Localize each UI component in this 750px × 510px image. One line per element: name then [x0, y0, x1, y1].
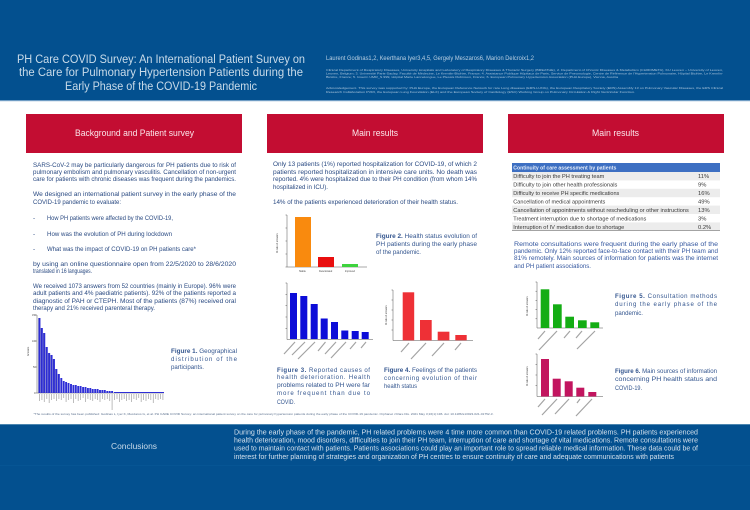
conclusions text — [234, 430, 698, 461]
text block: method and participants: translated in 16 languages. — [33, 268, 92, 275]
panel heading: main results middle: Main results — [352, 128, 398, 138]
conclusions heading: Conclusions — [111, 441, 157, 451]
panel heading: main results right: Main results — [592, 128, 639, 138]
table: continuity of care: Continuity of care assessment by patients — [513, 166, 616, 172]
table: continuity of care: 16% — [698, 191, 710, 197]
figure 1 caption: distribution of the — [171, 356, 238, 363]
table: continuity of care: Treatment interruption due to shortage of medications — [513, 216, 646, 222]
panel heading: background and patient survey: Background and Patient survey — [75, 128, 194, 138]
bullet list: survey aims: How was the evolution of PH during lockdown — [47, 231, 172, 238]
table: continuity of care: Interruption of IV medication due to shortage — [513, 225, 624, 231]
conclusions text: During the early phase of the pandemic, PH related problems were 4 time more common than COVID-19 related problems. PH patients experienced — [234, 430, 698, 436]
text block: method and participants — [33, 261, 237, 312]
text block: hospitalization: reported. 4% were hospitalized due to their PH condition (from whom 14% — [273, 176, 477, 183]
table: continuity of care: Difficulty to join the PH treating team — [513, 174, 604, 180]
text block: hospitalization — [273, 161, 478, 206]
text block: method and participants: We received 1073 answers from 52 countries (mainly in Europe). 96% were — [33, 283, 236, 290]
figure 3 caption: COVID. — [277, 399, 295, 406]
affiliations — [326, 68, 723, 79]
footnote: *The results of the survey has been published: Godinas L, Iyer K, Meszaros G, et al. PH CARE COVID Survey: an international patient survey on the care for pulmonary hypertension patients during the early phase of the COVID-19 pandemic. Orphanet J Rare Dis. 2021 May 3;16(1):196. doi: 10.1186/s13023-021-01752-3. — [34, 412, 494, 416]
footer band — [0, 424, 750, 510]
text block: remote consultations — [514, 241, 719, 270]
table: continuity of care: 13% — [698, 208, 710, 214]
conclusions text: health deterioration, mood disorders, difficulties to join their PH team, interruption of care and shortage of vital medications. Remote consultations were — [234, 438, 698, 444]
figure 3 caption — [277, 367, 371, 406]
figure 3 caption: health deterioration. Health — [277, 374, 370, 381]
figure 6 caption: COVID-19. — [615, 385, 642, 392]
text block: background: SARS-CoV-2 may be particularly dangerous for PH patients due to risk of — [33, 162, 236, 169]
header band — [0, 0, 750, 101]
text block: remote consultations: and PH patient associations. — [514, 263, 591, 270]
bullet list: survey aims: How PH patients were affected by the COVID-19, — [47, 215, 173, 222]
bar chart: figure 1 participants by country: Answers — [27, 346, 30, 356]
text block: background: pulmonary embolism and pulmonary vasculitis. Cancellation of non-urgent — [33, 169, 236, 176]
figure 5 caption — [615, 293, 718, 317]
bar chart: figure 2 health status: % ratio of answers — [276, 233, 279, 253]
table: continuity of care — [512, 163, 720, 231]
affiliations: Bicêtre, France; 5. Inserm UMR_S 999, Hôpital Marie Lannelongue, Le Plessis Robinson, France; 6. European Pulmonary Hypertension Association (PHA Europe), Vienna, Austria — [326, 75, 618, 79]
title: Early Phase of the COVID-19 Pandemic — [65, 79, 257, 93]
bar chart: figure 2 health status: Stable — [299, 270, 306, 273]
title — [17, 52, 305, 93]
figure 1 caption: Figure 1. Geographical — [171, 348, 237, 355]
figure 4 caption: health status — [384, 383, 417, 390]
text block: method and participants: diagnostic of PAH or CTEPH. Most of the patients (87%) received oral — [33, 298, 236, 305]
bar chart: figure 5 consultation methods — [526, 282, 603, 350]
figure 4 caption: concerning evolution of their — [384, 375, 477, 382]
text block: method and participants: therapy and 21% received parenteral therapy. — [33, 305, 155, 312]
figure 3 caption: problems related to PH were far — [277, 382, 370, 389]
table: continuity of care: 9% — [698, 182, 706, 188]
figure 6 caption — [615, 368, 717, 392]
figure 2 caption: PH patients during the early phase — [376, 241, 478, 248]
table: continuity of care: 3% — [698, 216, 706, 222]
rotated axis labels — [538, 399, 592, 416]
bar chart: figure 1 participants by country: 0 — [34, 392, 36, 395]
text block: remote consultations: Remote consultations were frequent during the early phase of the — [514, 241, 719, 248]
figure 5 caption: during the early phase of the — [615, 301, 718, 308]
text block: hospitalization: Only 13 patients (1%) reported hospitalization for COVID-19, of which 2 — [273, 161, 478, 168]
bar chart: figure 4 feelings: % ratio of answers — [385, 305, 388, 325]
bullet list: survey aims: - — [33, 215, 35, 222]
panel heading: main results middle — [267, 114, 483, 153]
text block: hospitalization: patients reported hospitalization in intensive care units. No death was — [273, 169, 477, 176]
authors: Laurent Godinas1,2, Keerthana Iyer3,4,5, Gergely Meszaros6, Marion Delcroix1,2 — [326, 55, 534, 62]
table: continuity of care: 11% — [698, 174, 709, 180]
bar chart: figure 2 health status: Improved — [345, 270, 356, 273]
text block: remote consultations: pandemic. Only 12% reported face-to-face contact with their PH team and — [514, 248, 718, 255]
figure 1 caption — [171, 348, 238, 371]
bar chart: figure 2 health status: Deteriorated — [319, 270, 333, 273]
rotated axis labels — [401, 343, 461, 359]
text block: background: We designed an international patient survey in the early phase of the — [33, 191, 237, 198]
bar chart: figure 6 information sources: % ratio of answers — [526, 366, 529, 386]
figure 3 caption: more frequent than due to — [277, 390, 371, 397]
text block: hospitalization: 14% of the patients experienced deterioration of their health status. — [273, 199, 458, 206]
figure 6 caption: Figure 6. Main sources of information — [615, 368, 717, 375]
table: continuity of care: Cancellation of appointments without rescheduling or other instructions — [513, 208, 689, 214]
acknowledgement: Acknowledgement. This survey was supported by: PHA Europe, the European Reference Network for rare Lung diseases (ERN-LUNG), the European Respiratory Society (ERS) Assembly 13 on Pulmonary Vascular Diseases, the ERS Clinical — [326, 86, 723, 90]
bar chart: figure 5 consultation methods: % ratio of answers — [526, 296, 529, 316]
figure 5 caption: pandemic. — [615, 310, 643, 317]
rotated axis labels — [538, 331, 595, 350]
text block: hospitalization: hospitalized in ICU). — [273, 184, 328, 191]
bar chart: figure 1 participants by country — [27, 314, 164, 410]
acknowledgement: Research Collaboration PVRI, the European Lung Foundation (ELF) and the European Society of Cardiology (ESC) Working Group on Pulmonary Circulation & Right Ventricular Function. — [326, 90, 635, 94]
text block: background — [33, 162, 237, 206]
bar chart: figure 6 information sources — [526, 354, 603, 416]
panel heading: background and patient survey — [26, 114, 242, 153]
figure 5 caption: Figure 5. Consultation methods — [615, 293, 717, 300]
text block: method and participants: by using an online questionnaire open from 22/5/2020 to 28/6/2020 — [33, 261, 237, 268]
affiliations: Clinical Department of Respiratory Diseases, University Hospitals and Laboratory of Respiratory Diseases & Thoracic Surgery (BREATHE), 2. Department of Chronic Diseases & Metabolism (CHROMETA), KU Leuven – University of Leuven, — [326, 68, 723, 72]
text block: background: COVID-19 pandemic to evaluate: — [33, 199, 121, 206]
affiliations: Leuven, Belgium; 3. Université Paris-Saclay, Faculté de Médecine, Le Kremlin-Bicêtre, France; 4. Assistance Publique Hôpitaux de Paris, Service de Pneumologie, Centre de Référence de l'Hypertension Pulmonaire, Hôpital Bicêtre, Le Kremlin- — [326, 72, 723, 76]
bar chart: figure 2 health status — [276, 215, 367, 273]
bar chart: figure 4 feelings — [385, 290, 473, 359]
bullet list: survey aims: - — [33, 231, 35, 238]
text block: method and participants: adult patients and 4% paediatric patients). 92% of the patients reported a — [33, 290, 236, 297]
figure 2 caption: of the pandemic. — [376, 249, 421, 256]
country axis labels — [40, 394, 163, 410]
table: continuity of care: Cancellation of medical appointments — [513, 200, 605, 206]
table: continuity of care: Difficulty to receive PH specific medications — [513, 191, 619, 197]
figure 6 caption: concerning PH health status and — [615, 376, 717, 383]
rotated axis labels — [284, 342, 366, 359]
figure 4 caption — [384, 367, 477, 390]
table: continuity of care: Difficulty to join other health professionals — [513, 182, 617, 188]
figure 1 caption: participants. — [171, 364, 204, 371]
bar chart: figure 3 causes of deterioration — [284, 283, 373, 359]
bar chart: figure 1 participants by country: 50 — [33, 366, 36, 369]
bar chart: figure 1 participants by country: 100 — [32, 340, 37, 343]
bullet list: survey aims: What was the impact of COVID-19 on PH patients care* — [47, 246, 197, 253]
text block: remote consultations: 81% remotely. Main sources of information for patients was the internet — [514, 255, 718, 262]
table: continuity of care: 49% — [698, 200, 710, 206]
figure 2 caption: Figure 2. Health status evolution of — [376, 233, 477, 240]
title: the Care for Pulmonary Hypertension Patients during the — [19, 65, 303, 79]
title: PH Care COVID Survey: An International Patient Survey on — [17, 52, 305, 66]
table: continuity of care: 0.2% — [698, 225, 711, 231]
bullet list: survey aims — [33, 215, 197, 253]
conclusions text: used to maintain contact with patients. Patients associations could play an important role to spread reliable medical information. These data could be of — [234, 446, 698, 452]
acknowledgement — [326, 86, 723, 94]
conclusions text: interest for further planning of strategies and organization of PH centres to ensure continuity of care and adequate communications with patients — [234, 454, 674, 461]
panel heading: main results right — [508, 114, 724, 153]
figure 2 caption — [376, 233, 478, 256]
bar chart: figure 1 participants by country: 150 — [32, 314, 37, 317]
figure 4 caption: Figure 4. Feelings of the patients — [384, 367, 477, 374]
text block: background: care for patients with chronic diseases was frequent during the pandemics. — [33, 176, 236, 183]
figure 3 caption: Figure 3. Reported causes of — [277, 367, 370, 374]
bullet list: survey aims: - — [33, 246, 35, 253]
